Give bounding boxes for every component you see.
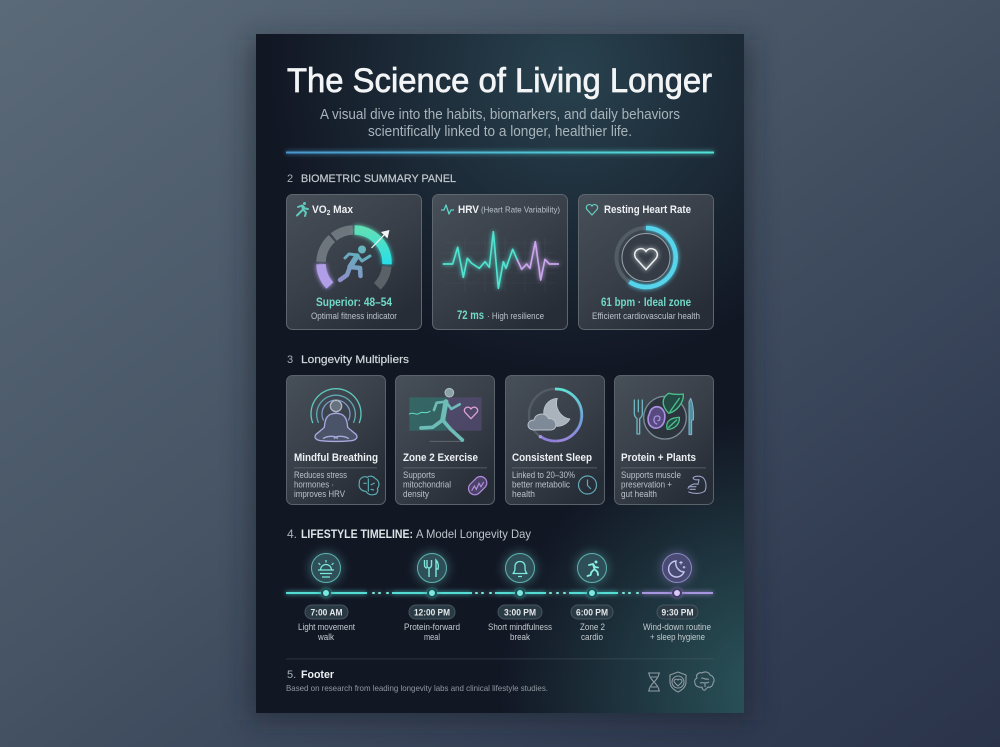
heading: lifestyle timeline [287,527,531,541]
footer note: Based on research from leading longevity labs and clinical lifestyle studies. [286,683,548,693]
heading: lifestyle timeline: 4. [287,527,297,541]
HRV title [458,204,560,216]
VO2 value: Superior: 48–54 [316,297,393,309]
panel: VO2 max [286,194,422,330]
icon: meditating figure [311,389,361,441]
VO2 note: Optimal fitness indicator [311,311,397,321]
title: The Science of Living Longer [287,62,712,100]
icon: flexed arm [688,476,706,493]
protein text: preservation + [621,480,672,490]
stop: 9:30 PM [643,554,711,642]
stop: 7:00 AM: Light movement [298,622,356,632]
zone 2 text: Supports [403,470,436,480]
mindful text [294,470,348,499]
timeline line [286,592,713,594]
heart rate note: Efficient cardiovascular health [592,311,700,321]
panel: HRV [432,194,568,330]
footer [286,669,714,693]
HRV value: · High resilience [487,311,544,321]
mindful text: Reduces stress [294,470,348,480]
HRV title: (Heart Rate Variability) [481,204,560,214]
stop: 12:00 PM: meal [424,632,440,642]
timeline [286,554,713,642]
heading: biometric summary: 2 [287,173,293,185]
footer icons [648,672,714,692]
sleep text [512,470,575,499]
icon: plate with fork, knife and greens [634,393,694,439]
stop: 7:00 AM: walk [317,632,335,642]
stop: 3:00 PM: 3:00 PM [504,606,536,618]
stop: 6:00 PM: Zone 2 [580,622,605,632]
card: consistent sleep [506,376,604,504]
HRV title: HRV [458,204,480,216]
stop: 3:00 PM [488,554,553,642]
VO2 title: Max [330,204,354,216]
poster panel [256,34,744,713]
stop: 9:30 PM: 9:30 PM [662,606,694,618]
heading: longevity multipliers: Longevity Multipliers [301,354,410,366]
zone 2 text: mitochondrial [403,480,451,490]
zone 2 title: Zone 2 Exercise [403,452,478,464]
card: protein plus plants [614,376,714,504]
protein title: Protein + Plants [621,452,696,464]
icon: pulse [441,205,454,214]
heart ring [616,228,676,287]
heading: lifestyle timeline: A Model Longevity Day [416,527,531,541]
heading: longevity multipliers: 3 [287,354,293,366]
stop: 6:00 PM [571,554,613,642]
HRV value [457,310,544,322]
mindful text: improves HRV [294,489,345,499]
HRV value: 72 ms [457,310,484,322]
zone 2 text: density [403,489,430,499]
icon: clock [578,476,596,494]
heading: lifestyle timeline: LIFESTYLE TIMELINE: [301,527,413,541]
stop: 3:00 PM: Short mindfulness [488,622,553,632]
stop: 12:00 PM: 12:00 PM [414,606,450,618]
stop: 12:00 PM [404,554,460,642]
panel: resting heart rate [578,194,714,330]
icon: moon and cloud ring [528,389,582,441]
HRV waveform [443,232,558,288]
stop: 3:00 PM: break [510,632,531,642]
protein text: gut health [621,489,657,499]
icon: runner small [297,202,308,216]
card: zone 2 exercise [396,376,494,504]
sleep text: health [512,489,535,499]
stop: 6:00 PM: 6:00 PM [576,606,608,618]
stop: 12:00 PM: Protein-forward [404,622,460,632]
footer: Footer [301,669,335,681]
protein text: Supports muscle [621,470,681,480]
stop: 7:00 AM [298,554,356,642]
zone 2 text [403,470,451,499]
card: mindful breathing [286,376,386,504]
heart rate title: Resting Heart Rate [604,204,691,216]
subtitle: A visual dive into the habits, biomarkers, and daily behaviors [320,107,680,123]
VO2 title: VO [312,204,328,216]
runner figure [340,246,370,280]
mindful text: hormones · [294,480,334,490]
poster shadow [250,40,750,720]
protein text [621,470,681,499]
subtitle [320,107,680,140]
subtitle: scientifically linked to a longer, healthier life. [368,124,632,140]
stop: 9:30 PM: + sleep hygiene [650,632,705,642]
gauge arrow [372,230,390,248]
mindful title: Mindful Breathing [294,452,378,464]
heading: biometric summary: BIOMETRIC SUMMARY PANEL [301,173,456,185]
icon: small heart [586,205,598,215]
stop: 7:00 AM: 7:00 AM [310,606,343,618]
stop: 9:30 PM: Wind-down routine [643,622,711,632]
sleep text: better metabolic [512,480,571,490]
icon: runner over zones [409,388,482,441]
VO2 title: 2 [327,210,330,217]
icon: mitochondrion [466,474,489,497]
sleep title: Consistent Sleep [512,452,592,464]
stop: 6:00 PM: cardio [581,632,603,642]
gauge [321,230,387,286]
footer: 5. [287,669,296,681]
heart rate value: 61 bpm · Ideal zone [601,297,691,309]
sleep text: Linked to 20–30% [512,470,575,480]
icon: brain [359,476,379,495]
title divider [286,152,714,154]
